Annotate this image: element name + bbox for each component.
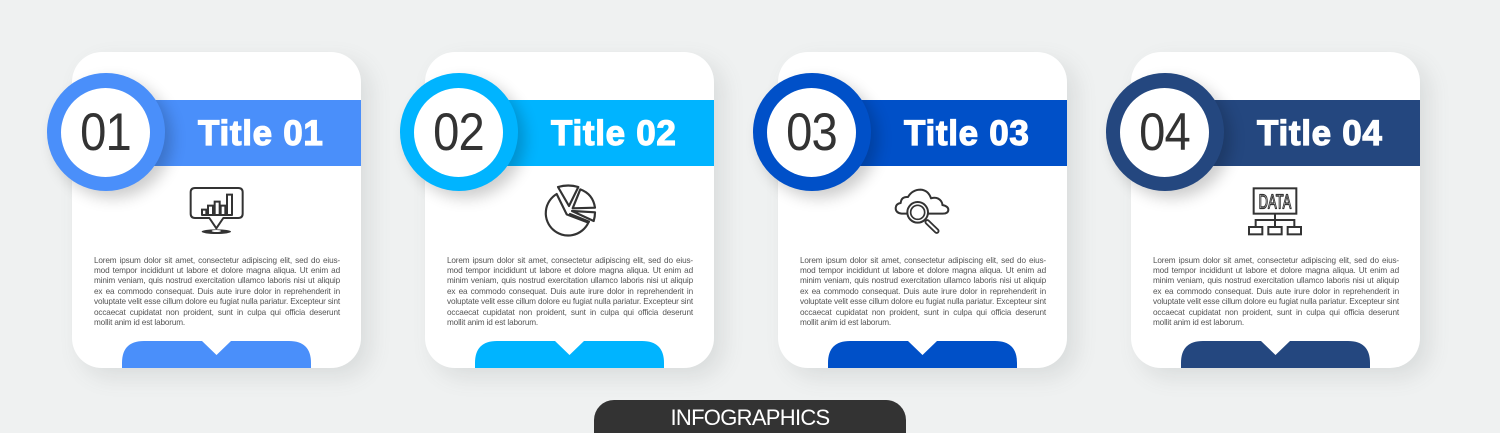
heading: Title 03: Title 03 bbox=[904, 114, 1030, 153]
text block: Lorem ipsum dolor sit amet, consectetur adipiscing elit, sed do eius- bbox=[800, 256, 1046, 264]
bottom tab bbox=[1181, 341, 1370, 368]
text block bbox=[447, 256, 694, 327]
text block: occaecat cupidatat non proident, sunt in culpa qui officia deserunt bbox=[447, 308, 693, 317]
number badge 01 bbox=[47, 73, 165, 191]
number badge 04: 04 bbox=[1139, 103, 1190, 162]
text block: ex ea commodo consequat. Duis aute irure dolor in reprehenderit in bbox=[94, 287, 340, 296]
text block: occaecat cupidatat non proident, sunt in culpa qui officia deserunt bbox=[1153, 308, 1399, 317]
text block: minim veniam, quis nostrud exercitation ullamco laboris nisi ut aliquip bbox=[800, 276, 1046, 285]
title band bbox=[425, 100, 714, 166]
title band bbox=[72, 100, 361, 166]
icon: pie chart bbox=[544, 184, 596, 237]
heading: Title 04: Title 04 bbox=[1257, 114, 1383, 153]
panel: step 04 bbox=[1106, 52, 1433, 381]
number badge 01: 01 bbox=[80, 103, 131, 162]
text block: mod tempor incididunt ut labore et dolore magna aliqua. Ut enim ad bbox=[1153, 266, 1399, 275]
card background bbox=[1131, 52, 1420, 368]
icon: bar chart speech bubble bbox=[190, 187, 244, 234]
bottom tab bbox=[122, 341, 311, 368]
card background bbox=[72, 52, 361, 368]
text block: mod tempor incididunt ut labore et dolore magna aliqua. Ut enim ad bbox=[800, 266, 1046, 275]
icon: cloud with magnifier bbox=[894, 188, 950, 234]
number badge 04 bbox=[1106, 73, 1224, 191]
icon: data hierarchy bbox=[1248, 187, 1302, 236]
text block: mollit anim id est laborum. bbox=[94, 318, 185, 327]
text block: Lorem ipsum dolor sit amet, consectetur adipiscing elit, sed do eius- bbox=[1153, 256, 1399, 264]
text block: mod tempor incididunt ut labore et dolore magna aliqua. Ut enim ad bbox=[447, 266, 693, 275]
bottom tab bbox=[475, 341, 664, 368]
heading: Title 01: Title 01 bbox=[198, 114, 324, 153]
footer badge: INFOGRAPHICS: INFOGRAPHICS bbox=[670, 405, 830, 430]
card background bbox=[425, 52, 714, 368]
text block: ex ea commodo consequat. Duis aute irure dolor in reprehenderit in bbox=[1153, 287, 1399, 296]
text block: mod tempor incididunt ut labore et dolore magna aliqua. Ut enim ad bbox=[94, 266, 340, 275]
number badge 03 bbox=[753, 73, 871, 191]
text block: occaecat cupidatat non proident, sunt in culpa qui officia deserunt bbox=[94, 308, 340, 317]
text block: minim veniam, quis nostrud exercitation ullamco laboris nisi ut aliquip bbox=[447, 276, 693, 285]
text block: minim veniam, quis nostrud exercitation ullamco laboris nisi ut aliquip bbox=[1153, 276, 1399, 285]
card background bbox=[778, 52, 1067, 368]
footer badge: INFOGRAPHICS bbox=[594, 400, 906, 433]
text block: voluptate velit esse cillum dolore eu fugiat nulla pariatur. Excepteur sint bbox=[94, 297, 340, 306]
icon: data hierarchy: DATA bbox=[1259, 190, 1291, 213]
text block: Lorem ipsum dolor sit amet, consectetur adipiscing elit, sed do eius- bbox=[94, 256, 340, 264]
text block: mollit anim id est laborum. bbox=[800, 318, 891, 327]
title band bbox=[1131, 100, 1420, 166]
number badge 03: 03 bbox=[786, 103, 837, 162]
text block: mollit anim id est laborum. bbox=[1153, 318, 1244, 327]
title band bbox=[778, 100, 1067, 166]
text block bbox=[1153, 256, 1400, 327]
heading: Title 02: Title 02 bbox=[551, 114, 677, 153]
text block: ex ea commodo consequat. Duis aute irure dolor in reprehenderit in bbox=[447, 287, 693, 296]
panel: step 03 bbox=[753, 52, 1080, 381]
text block bbox=[800, 256, 1046, 327]
text block: voluptate velit esse cillum dolore eu fugiat nulla pariatur. Excepteur sint bbox=[447, 297, 693, 306]
panel: step 02 bbox=[400, 52, 727, 381]
text block: voluptate velit esse cillum dolore eu fugiat nulla pariatur. Excepteur sint bbox=[1153, 297, 1399, 306]
panel: step 01 bbox=[47, 52, 374, 381]
text block: voluptate velit esse cillum dolore eu fugiat nulla pariatur. Excepteur sint bbox=[800, 297, 1046, 306]
text block: ex ea commodo consequat. Duis aute irure dolor in reprehenderit in bbox=[800, 287, 1046, 296]
text block: minim veniam, quis nostrud exercitation ullamco laboris nisi ut aliquip bbox=[94, 276, 340, 285]
text block: mollit anim id est laborum. bbox=[447, 318, 538, 327]
text block: Lorem ipsum dolor sit amet, consectetur adipiscing elit, sed do eius- bbox=[447, 256, 693, 264]
text block bbox=[94, 256, 340, 327]
bottom tab bbox=[828, 341, 1017, 368]
text block: occaecat cupidatat non proident, sunt in culpa qui officia deserunt bbox=[800, 308, 1046, 317]
number badge 02 bbox=[400, 73, 518, 191]
number badge 02: 02 bbox=[433, 103, 484, 162]
